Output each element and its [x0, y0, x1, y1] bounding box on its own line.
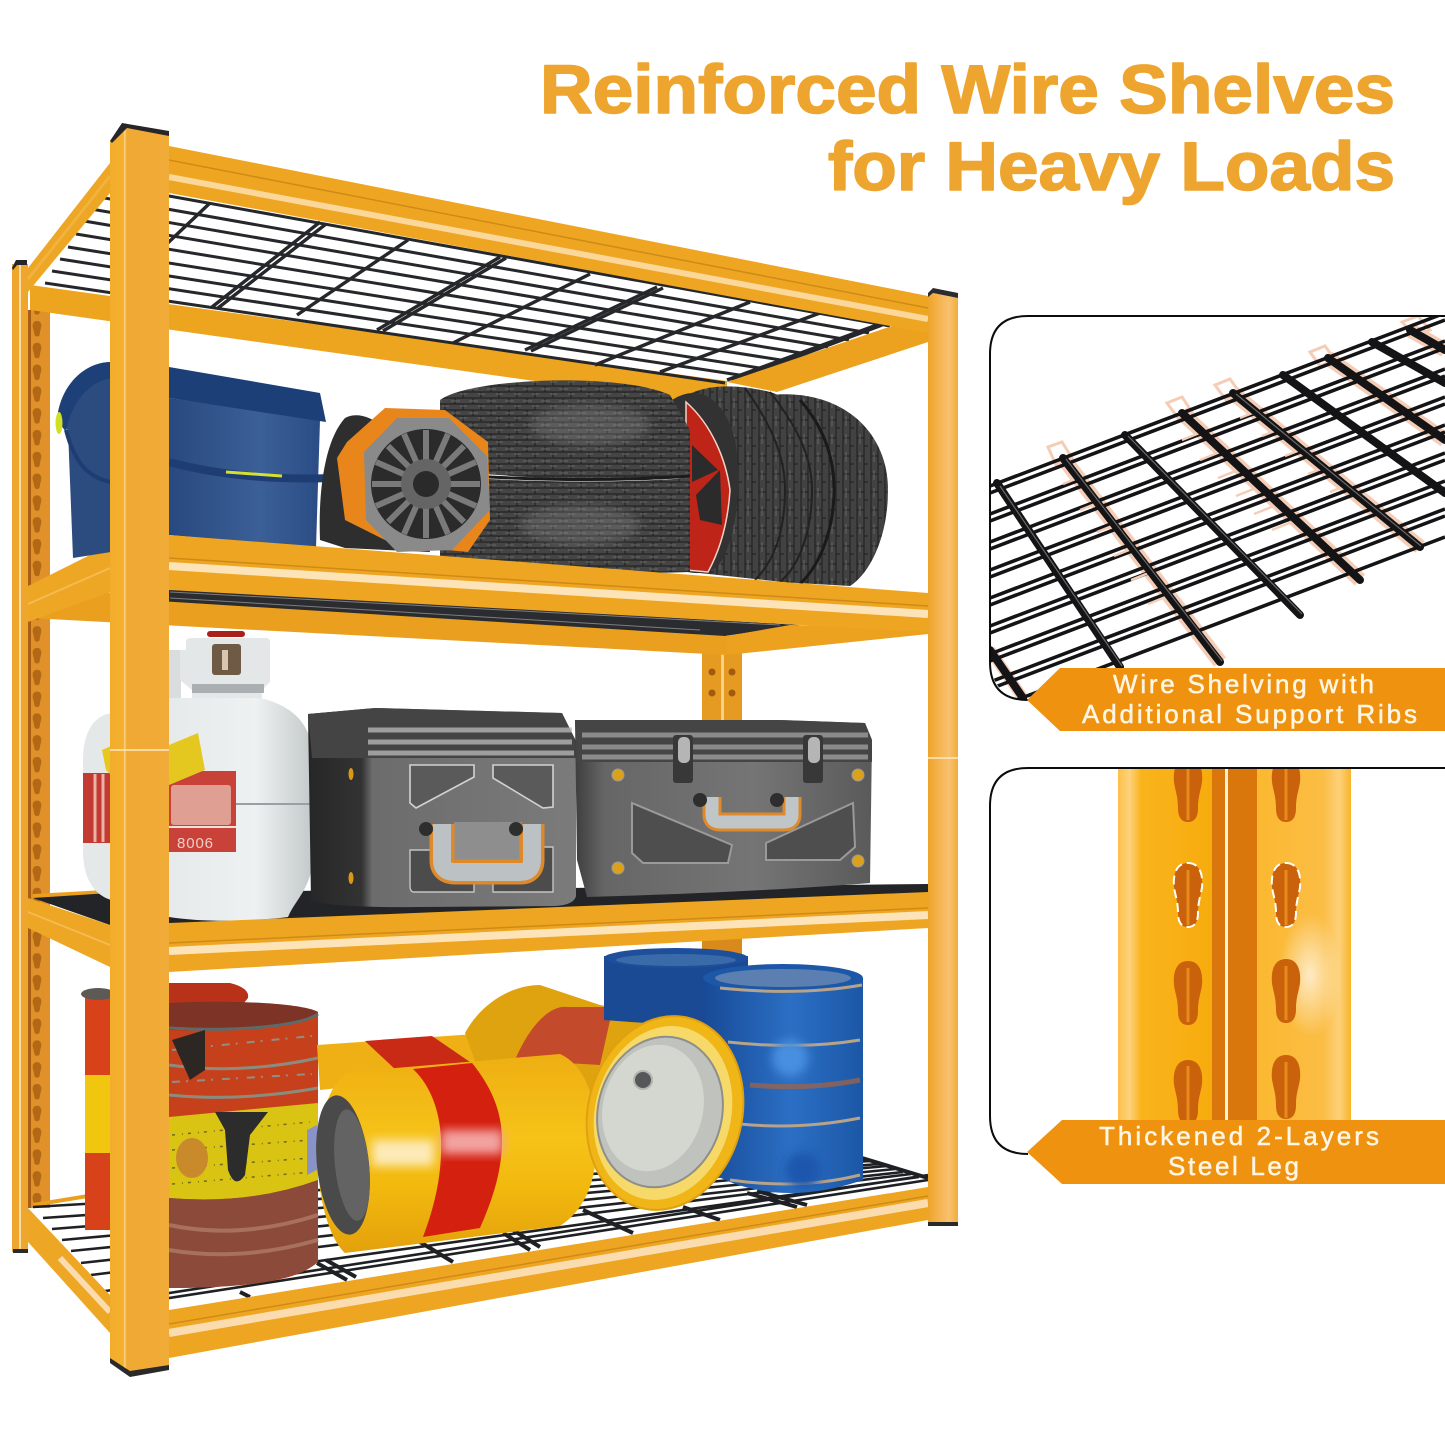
ribbon label: Thickened 2-Layers	[1099, 1121, 1379, 1151]
panel outline	[990, 316, 1445, 700]
right tool case	[575, 720, 872, 897]
rear red barrel	[81, 983, 248, 1230]
ribbon	[1027, 1120, 1445, 1184]
shelving rack: front structure	[110, 123, 958, 1377]
front right post	[928, 288, 958, 1226]
shelf 2 right side beam	[727, 625, 928, 655]
ribbon	[1027, 668, 1445, 731]
shelf 3 left side beam	[28, 898, 110, 967]
wire shelf close-up	[990, 313, 1445, 710]
shelf 2 rear beam	[30, 587, 727, 655]
ribbon label: Steel Leg	[1168, 1151, 1299, 1181]
ribbon label	[1099, 1121, 1379, 1181]
title: Reinforced Wire Shelves	[540, 51, 1395, 128]
bottom wire shelf	[33, 1158, 928, 1308]
open yellow barrel end	[567, 999, 763, 1227]
shelf 3 wire	[33, 884, 928, 925]
callout: wire shelving	[990, 313, 1445, 731]
rear propane tank	[83, 650, 181, 900]
bottom front beam	[169, 1187, 928, 1358]
left tool case	[308, 708, 576, 907]
top shelf right side beam	[727, 317, 928, 392]
title: for Heavy Loads	[828, 128, 1395, 205]
ribbon label	[1082, 669, 1417, 729]
rear right post	[702, 640, 742, 956]
stored items	[56, 362, 888, 1288]
shelf 2 wire	[110, 585, 800, 636]
rear yellow barrel	[317, 985, 665, 1110]
panel outline	[990, 768, 1445, 1154]
bucket	[56, 362, 332, 558]
top front beam	[169, 146, 928, 333]
rear left post	[12, 260, 50, 1253]
front left post	[110, 123, 169, 1377]
third front beam	[169, 892, 928, 972]
middle tire with red rim	[672, 386, 834, 584]
front yellow barrel	[310, 1054, 597, 1253]
top shelf left side beam	[28, 163, 110, 292]
wheel hub	[320, 408, 490, 552]
rusty barrel	[169, 1002, 318, 1288]
bottom shelf left side beam	[28, 1208, 110, 1333]
shelf 2 left side beam	[28, 545, 110, 622]
front blue barrel	[703, 964, 863, 1193]
shelving rack: rear structure	[12, 163, 928, 1333]
leg close-up	[1118, 758, 1351, 1129]
top shelf rear beam	[30, 285, 727, 408]
top wire shelf	[45, 185, 890, 383]
ribbon label: Additional Support Ribs	[1082, 699, 1417, 729]
ribbon label: Wire Shelving with	[1113, 669, 1374, 699]
rear tire	[770, 394, 888, 586]
rear blue barrel	[604, 948, 748, 1030]
title	[540, 51, 1395, 205]
front propane tank	[169, 631, 313, 921]
callout: steel leg	[990, 758, 1445, 1184]
second front beam	[169, 535, 928, 632]
stacked tires	[440, 380, 690, 573]
front propane tank: 8006	[177, 835, 213, 852]
